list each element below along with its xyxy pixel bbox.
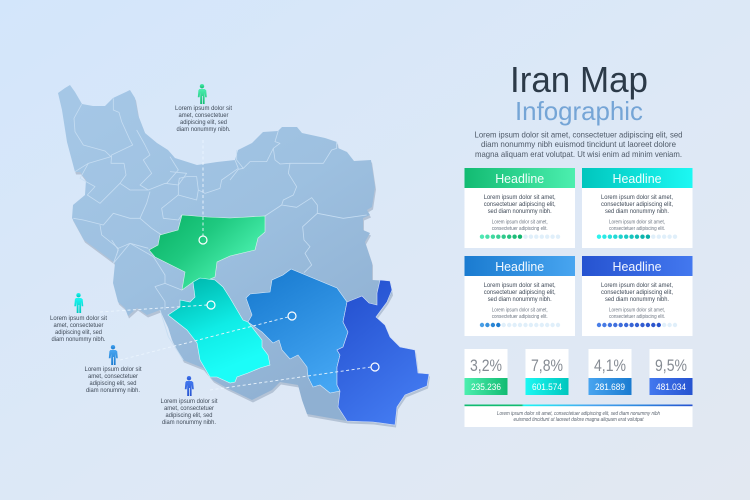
small text xyxy=(492,220,548,232)
body text: Lorem ipsum dolor sit amet, xyxy=(601,282,673,289)
stat: 7,8%: 7,8% xyxy=(531,356,563,375)
region: green province xyxy=(149,215,265,290)
intro paragraph: Lorem ipsum dolor sit amet, consectetuer adipiscing elit, sed xyxy=(474,130,683,140)
callout: teal region text: adipiscing elit, sed xyxy=(55,330,102,336)
intro paragraph xyxy=(474,130,683,159)
small text: consectetuer adipiscing elit. xyxy=(609,314,665,320)
headline: Headline xyxy=(612,172,662,186)
footer note panel: Lorem ipsum dolor sit amet, consectetuer adipiscing elit, sed diam nonummy nibh xyxy=(497,411,660,417)
card header green xyxy=(464,168,575,188)
body text: sed diam nonummy nibh. xyxy=(488,208,552,215)
callout: green region text: Lorem ipsum dolor sit xyxy=(175,106,232,112)
callout: teal region text xyxy=(50,316,107,343)
callout: blue region text: Lorem ipsum dolor sit xyxy=(84,367,142,373)
callout: green region text: amet, consectetuer xyxy=(178,113,228,119)
small text xyxy=(609,220,665,232)
map base provinces xyxy=(58,85,429,425)
region: teal province xyxy=(168,278,270,383)
callout: blue region text: diam nonummy nibh. xyxy=(86,388,140,394)
small text: consectetuer adipiscing elit. xyxy=(609,226,665,232)
callout: dark blue region text: amet, consectetuer xyxy=(164,406,214,412)
stat: 9,5% xyxy=(650,349,692,395)
callout: dark blue region text: Lorem ipsum dolor sit xyxy=(160,399,218,405)
body text: sed diam nonummy nibh. xyxy=(488,296,552,303)
body text xyxy=(484,194,556,215)
small text: Lorem ipsum dolor sit amet, xyxy=(492,308,548,314)
callout: green region text xyxy=(175,106,232,133)
progress dots xyxy=(480,323,560,327)
small text: Lorem ipsum dolor sit amet, xyxy=(609,220,665,226)
stat: 3,2%: 235.236 xyxy=(471,382,501,392)
callout: teal region text: amet, consectetuer xyxy=(54,323,104,329)
stat: 7,8% xyxy=(526,349,568,395)
stat: 9,5%: 9,5% xyxy=(655,356,687,375)
title: Iran Map xyxy=(510,59,648,100)
small text xyxy=(492,308,548,320)
intro paragraph: diam nonummy nibh euismod tincidunt ut laoreet dolore xyxy=(481,140,676,149)
stat: 9,5%: 481.034 xyxy=(656,382,686,392)
card header blue xyxy=(464,256,575,276)
progress dots xyxy=(597,234,677,239)
stat: 4,1%: 281.689 xyxy=(595,382,625,392)
stat: 7,8%: 601.574 xyxy=(532,382,562,392)
stat: 3,2%: 3,2% xyxy=(470,356,502,375)
dashed leader lines xyxy=(100,140,371,390)
progress dots xyxy=(480,234,560,239)
icon: person blue xyxy=(109,345,118,365)
map of Iran xyxy=(58,85,430,428)
body text xyxy=(601,282,673,303)
progress dots xyxy=(597,323,677,327)
callout: blue region text xyxy=(84,367,142,394)
region: mid blue province xyxy=(246,269,348,393)
body text xyxy=(601,194,673,215)
small text: consectetuer adipiscing elit. xyxy=(492,314,548,320)
body text: sed diam nonummy nibh. xyxy=(605,208,669,215)
footer note panel: euismod tincidunt ut laoreet dolore magna aliquam erat volutpat xyxy=(514,417,644,423)
body text: sed diam nonummy nibh. xyxy=(605,296,669,303)
card header dark blue xyxy=(582,256,692,276)
body text: Lorem ipsum dolor sit amet, xyxy=(484,194,556,201)
callout: teal region text: diam nonummy nibh. xyxy=(52,337,106,343)
panel: card dark blue xyxy=(582,256,692,336)
small text: consectetuer adipiscing elit. xyxy=(492,226,548,232)
body text: consectetuer adipiscing elit, xyxy=(484,289,556,296)
callout: dark blue region text: diam nonummy nibh. xyxy=(162,420,216,426)
stat: 4,1% xyxy=(588,349,632,395)
card header teal xyxy=(582,168,692,188)
callout: blue region text: amet, consectetuer xyxy=(88,374,138,380)
panel: card teal xyxy=(582,168,692,248)
map shadow xyxy=(59,88,430,428)
stat: 4,1%: 4,1% xyxy=(594,356,626,375)
intro paragraph: magna aliquam erat volutpat. Ut wisi enim ad minim veniam. xyxy=(475,150,682,159)
callout: blue region text: adipiscing elit, sed xyxy=(90,381,136,387)
stat: 3,2% xyxy=(464,349,508,395)
panel: card blue xyxy=(464,256,575,336)
marker: mid blue region xyxy=(288,312,296,320)
icon: person dark blue xyxy=(185,376,194,396)
province borders xyxy=(73,98,367,360)
body text: consectetuer adipiscing elit, xyxy=(601,201,673,208)
callout: dark blue region text xyxy=(160,399,218,426)
callout: dark blue region text: adipiscing elit, sed xyxy=(166,413,212,419)
region: dark blue province xyxy=(337,280,429,425)
small text xyxy=(609,308,665,320)
marker: teal region xyxy=(207,301,215,309)
headline: Headline xyxy=(612,260,662,274)
headline: Headline xyxy=(495,260,544,274)
callout: green region text: adipiscing elit, sed xyxy=(180,120,227,126)
icon: person teal xyxy=(74,293,83,313)
panel: card green xyxy=(464,168,575,248)
headline: Headline xyxy=(495,172,544,186)
small text: Lorem ipsum dolor sit amet, xyxy=(492,220,548,226)
marker: green region xyxy=(199,236,207,244)
body text: consectetuer adipiscing elit, xyxy=(601,289,673,296)
body text: Lorem ipsum dolor sit amet, xyxy=(484,282,556,289)
subtitle: Infographic xyxy=(515,96,643,126)
callout: teal region text: Lorem ipsum dolor sit xyxy=(50,316,107,322)
footer note panel xyxy=(464,404,692,427)
marker: dark blue region xyxy=(371,363,379,371)
callout: green region text: diam nonummy nibh. xyxy=(176,127,231,133)
body text: consectetuer adipiscing elit, xyxy=(484,201,556,208)
small text: Lorem ipsum dolor sit amet, xyxy=(609,308,665,314)
body text: Lorem ipsum dolor sit amet, xyxy=(601,194,673,201)
body text xyxy=(484,282,556,303)
icon: person green xyxy=(198,84,207,104)
